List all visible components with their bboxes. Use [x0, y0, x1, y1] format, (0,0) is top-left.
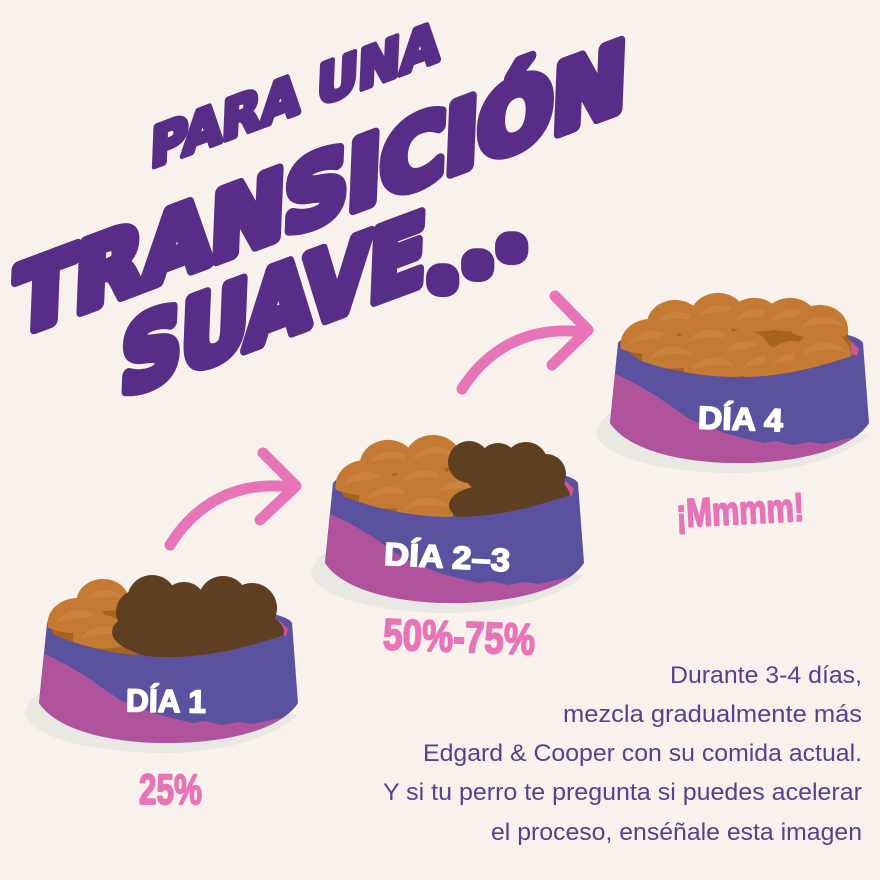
food: day 2-3 mix: [335, 435, 570, 525]
arrow: day 1 to day 2-3: [170, 453, 296, 545]
explanatory paragraph: el proceso, enséñale esta imagen: [491, 819, 862, 846]
exclamation: mmmm: ¡Mmmm!: [675, 486, 805, 536]
bowl: day 4: [596, 293, 873, 473]
explanatory paragraph: Durante 3-4 días,: [670, 662, 862, 689]
bowl: day 1: [25, 575, 302, 753]
title line: suave: SUAVE: [119, 192, 428, 420]
label: día 2-3: DÍA 2–3: [383, 536, 511, 578]
bowl: day 2-3: [311, 435, 588, 613]
explanatory paragraph: Y si tu perro te pregunta si puedes acelerar: [383, 779, 862, 806]
title ellipsis dots: ...: [437, 224, 517, 291]
explanatory paragraph: [383, 662, 862, 846]
food: day 4 kibble: [620, 293, 851, 380]
title: [13, 9, 628, 420]
title line: transición: TRANSICIÓN: [13, 20, 628, 359]
explanatory paragraph: Edgard & Cooper con su comida actual.: [423, 740, 862, 767]
arrow: day 2-3 to day 4: [462, 296, 588, 389]
label: día 1: DÍA 1: [126, 682, 206, 720]
explanatory paragraph: mezcla gradualmente más: [563, 701, 862, 728]
percentage: 50%-75%: 50%-75%: [382, 610, 536, 665]
title line: para una: PARA UNA: [149, 9, 441, 181]
percentage: 25%: 25%: [139, 766, 202, 814]
label: día 4: DÍA 4: [697, 400, 784, 438]
food: day 1 mix: [47, 575, 284, 662]
